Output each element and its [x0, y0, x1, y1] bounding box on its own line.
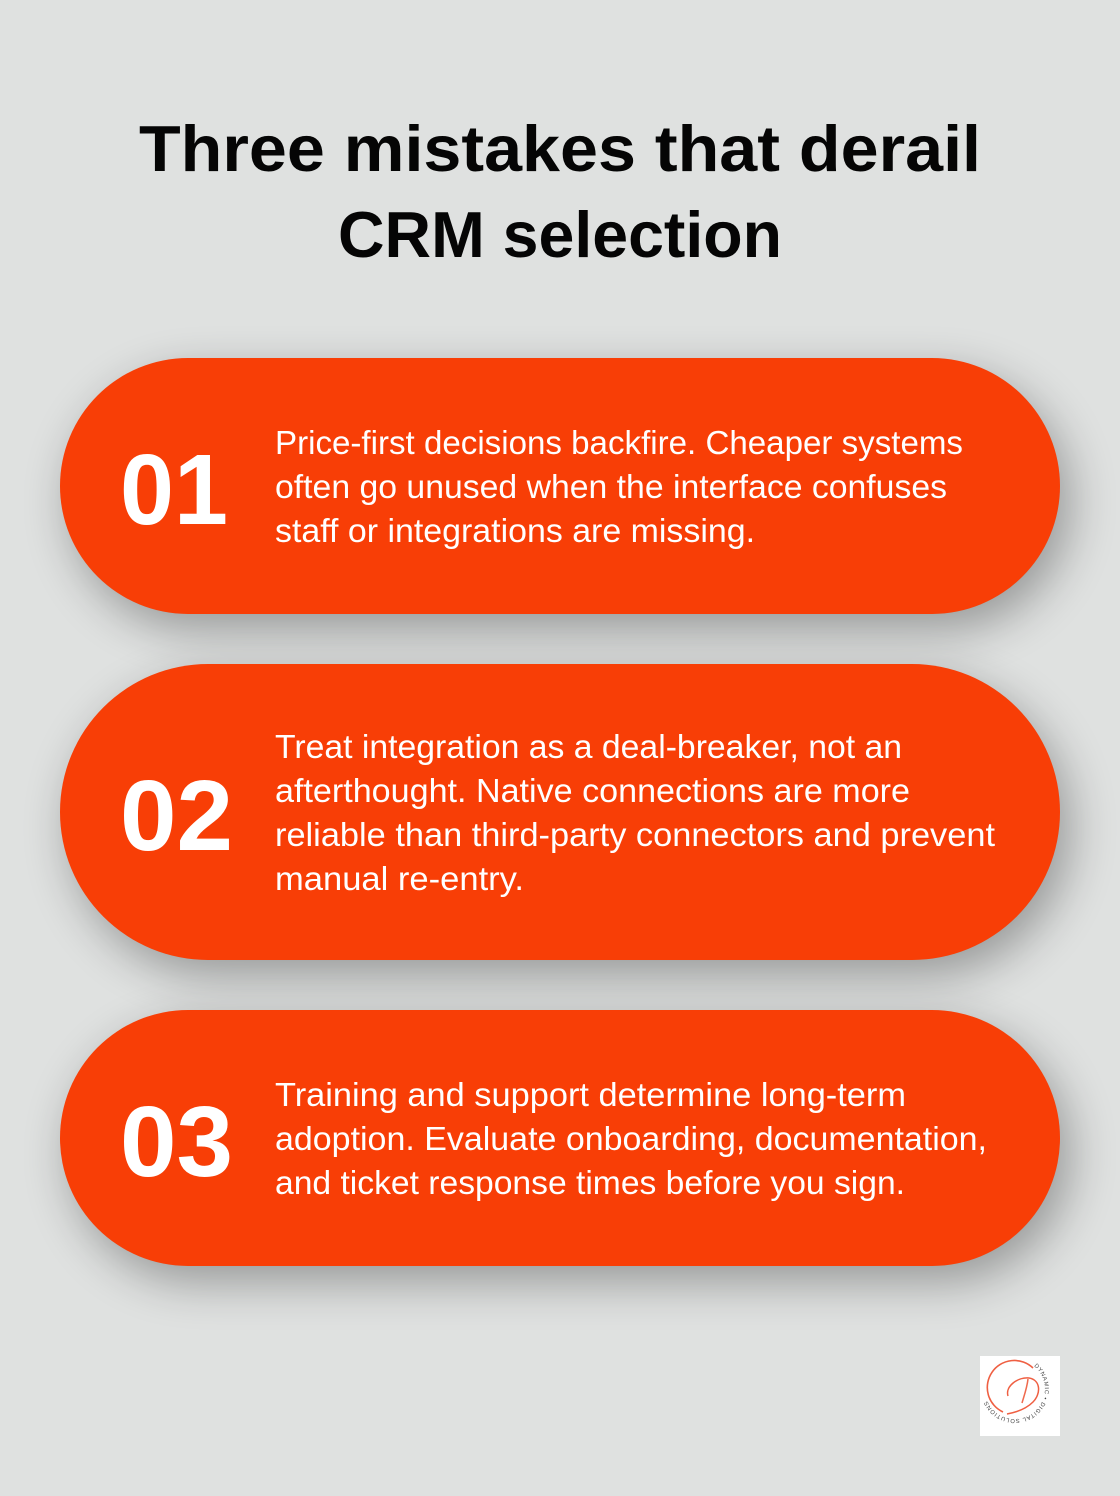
text block: mistake 2: Treat integration as a deal-breaker, not an — [275, 728, 902, 765]
text block: mistake 1 — [275, 424, 963, 549]
text block: mistake 2 — [275, 728, 995, 897]
text block: mistake 2: manual re-entry. — [275, 860, 524, 897]
title: CRM selection — [338, 198, 782, 271]
text block: mistake 3: Training and support determine long-term — [275, 1076, 906, 1113]
title: Three mistakes that derail — [139, 112, 981, 185]
text block: mistake 3: and ticket response times before you sign. — [275, 1164, 905, 1201]
icon: Dynamic Digital Solutions logo: DYNAMIC • DIGITAL SOLUTIONS — [984, 1363, 1049, 1424]
panel: mistake 2 pill — [60, 664, 1060, 960]
title — [139, 112, 981, 271]
number 02: 02 — [120, 760, 233, 872]
text block: mistake 3: adoption. Evaluate onboarding, documentation, — [275, 1120, 987, 1157]
text block: mistake 2: afterthought. Native connections are more — [275, 772, 910, 809]
text block: mistake 1: staff or integrations are missing. — [275, 512, 755, 549]
text block: mistake 2: reliable than third-party connectors and prevent — [275, 816, 995, 853]
text block: mistake 1: Price-first decisions backfire. Cheaper systems — [275, 424, 963, 461]
panel: mistake 1 pill — [60, 358, 1060, 614]
text block: mistake 1: often go unused when the interface confuses — [275, 468, 947, 505]
text block: mistake 3 — [275, 1076, 987, 1201]
number 03: 03 — [120, 1086, 233, 1198]
number 01: 01 — [120, 434, 228, 546]
panel: mistake 3 pill — [60, 1010, 1060, 1266]
icon: Dynamic Digital Solutions logo — [980, 1356, 1060, 1436]
